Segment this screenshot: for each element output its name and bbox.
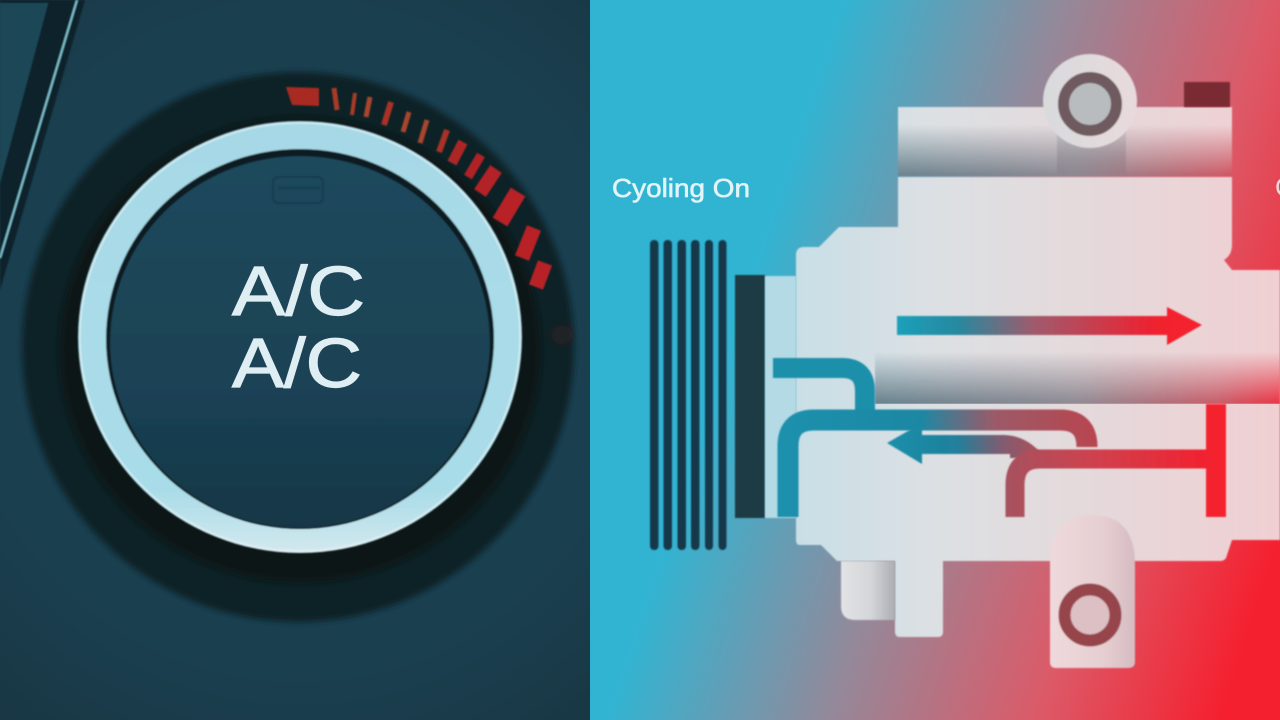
pipe: long return	[788, 420, 1087, 517]
vertical red pipe	[1206, 404, 1226, 517]
compressor neck	[765, 276, 796, 518]
clutch plate	[735, 275, 765, 518]
compressor main body	[796, 177, 1280, 637]
pipe: red hot line	[1015, 459, 1210, 517]
panel: compressor cycling diagram	[590, 0, 1280, 720]
dial chrome ring	[78, 121, 522, 553]
label: cycling on: Cyoling On	[612, 173, 750, 203]
button label A/C lower: A/C	[232, 324, 362, 402]
dial face	[110, 156, 490, 528]
lower left mount	[841, 561, 895, 620]
button label A/C upper: A/C	[232, 252, 365, 330]
dial outer bezel	[22, 72, 574, 622]
body lower shadow band	[875, 352, 1280, 404]
top fitting with ring	[1043, 54, 1137, 148]
lower mount with ring	[1050, 515, 1135, 668]
icon: faint indicator slot	[273, 177, 323, 203]
panel: car dashboard A/C button	[0, 0, 586, 623]
red temperature scale ticks	[286, 87, 574, 346]
top red connector	[1184, 82, 1230, 107]
top flow arrow	[897, 307, 1202, 345]
pipe: blue feed	[773, 368, 865, 415]
top fitting stem	[1056, 132, 1126, 170]
icon: clutch fins	[650, 240, 726, 550]
dashboard trim strip	[0, 0, 85, 290]
compressor top block	[898, 107, 1232, 176]
return flow arrow	[886, 430, 1039, 465]
